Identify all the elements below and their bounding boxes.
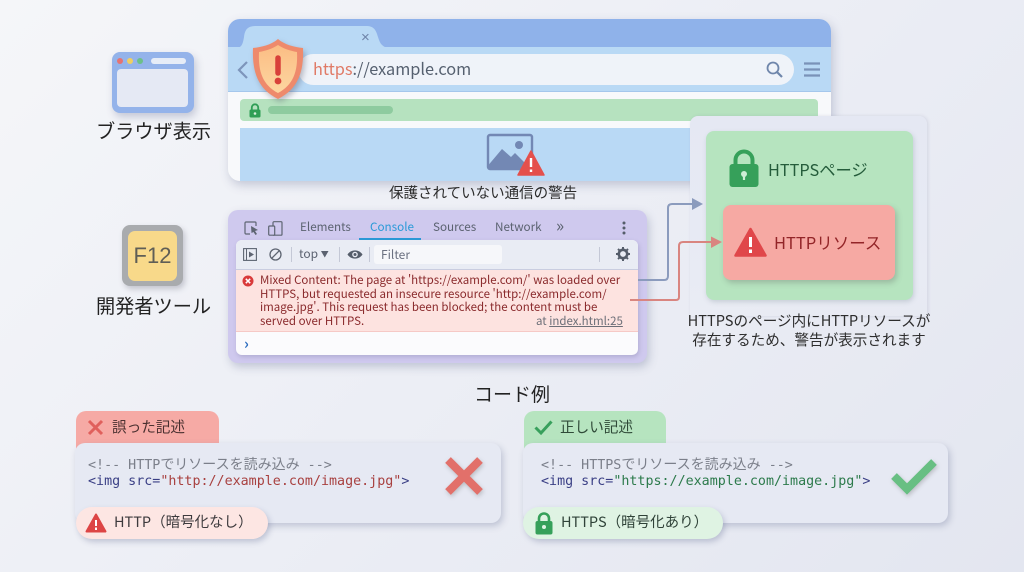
active tab underline	[359, 238, 421, 240]
icon: small lock	[250, 103, 260, 118]
icon: error	[242, 276, 254, 286]
icon: large check	[891, 459, 938, 497]
icon: search	[766, 62, 783, 78]
error text: Mixed Content: The page at 'https://example.com/' was loaded over	[260, 272, 620, 288]
tab: correct	[524, 411, 666, 453]
icon: device	[268, 221, 283, 236]
error text	[260, 272, 620, 328]
panel: https page	[706, 131, 913, 300]
divider	[291, 247, 292, 262]
icon: kebab menu	[622, 222, 626, 234]
caption: explanation: HTTPSのページ内にHTTPリソースが	[688, 310, 930, 331]
code comment: <!-- HTTPでリソースを読み込み -->	[88, 454, 332, 474]
icon: lock	[536, 512, 552, 534]
icon: warning	[734, 228, 767, 257]
panel: explanation card	[690, 116, 927, 316]
label: https: HTTPS（暗号化あり）	[561, 511, 708, 532]
label: http resource: HTTPリソース	[774, 230, 881, 254]
error text: image.jpg'. This request has been blocked; the content must be	[260, 299, 597, 315]
panel: devtools console: »	[556, 212, 564, 237]
error text: HTTPS, but requested an insecure resource 'http://example.com/	[260, 286, 607, 302]
caption: explanation: 存在するため、警告が表示されます	[692, 329, 926, 350]
console toolbar	[236, 240, 638, 270]
address bar	[298, 54, 794, 85]
url text: https://example.com	[313, 56, 471, 80]
label: http: HTTP（暗号化なし）	[114, 511, 253, 532]
icon: small check	[534, 420, 552, 435]
divider	[369, 247, 370, 262]
tab close mark: ×	[361, 29, 370, 46]
label: incorrect: 誤った記述	[112, 416, 185, 437]
code line: <img src="https://example.com/image.jpg">	[541, 474, 870, 489]
caption: insecure warning: 保護されていない通信の警告	[389, 182, 577, 203]
panel: devtools console: Console	[370, 218, 414, 235]
panel: http resource	[723, 205, 895, 280]
code line: <img src="http://example.com/image.jpg">	[88, 474, 409, 489]
filter input	[374, 245, 502, 264]
badge: http no encryption	[76, 507, 268, 539]
filter input: Filter	[381, 246, 410, 263]
icon: eye	[348, 250, 362, 259]
browser title bar	[228, 19, 831, 47]
icon: small cross	[88, 420, 103, 435]
panel: devtools console: Network	[495, 218, 542, 235]
icon: menu	[804, 62, 820, 77]
caption: explanation	[688, 310, 930, 350]
arrow: error to http resource	[630, 236, 722, 301]
heading: code examples: コード例	[474, 380, 550, 407]
panel: incorrect code	[75, 443, 501, 523]
context selector: top ▼	[299, 245, 329, 262]
browser toolbar	[228, 47, 831, 92]
devtools tabs: Elements	[300, 218, 351, 235]
error message	[236, 270, 638, 332]
icon: warning	[86, 514, 106, 532]
panel: correct code	[523, 443, 948, 523]
icon: browser window	[112, 52, 194, 113]
key cap	[128, 231, 177, 281]
label: https page: HTTPSページ	[768, 157, 868, 181]
icon: inspect	[244, 221, 258, 235]
panel: devtools console: Sources	[433, 218, 476, 235]
divider	[339, 247, 340, 262]
panel: browser window	[228, 19, 831, 181]
divider	[599, 247, 600, 262]
back arrow	[238, 61, 248, 79]
icon: sidebar toggle	[243, 248, 257, 261]
icon: blocked image	[486, 134, 545, 176]
icon: clear console	[269, 248, 282, 261]
tab: incorrect	[76, 411, 219, 453]
icon: large cross	[445, 457, 484, 498]
browser tab	[240, 26, 384, 47]
icon: F12 key	[122, 225, 183, 286]
source link: at index.html:25	[536, 313, 623, 329]
arrow: console to https page	[638, 198, 703, 281]
prompt: ›	[244, 333, 249, 354]
panel: devtools console	[228, 210, 647, 363]
code comment: <!-- HTTPSでリソースを読み込み -->	[541, 454, 793, 474]
content area	[240, 128, 831, 181]
label: developer tools: 開発者ツール	[96, 291, 211, 319]
icon: warning shield	[252, 39, 308, 104]
label: browser display: ブラウザ表示	[96, 116, 211, 144]
badge: https encrypted	[523, 507, 723, 539]
console body	[236, 240, 638, 355]
key cap: F12	[134, 243, 171, 268]
error text: served over HTTPS.	[260, 312, 364, 328]
icon: lock	[730, 150, 758, 187]
label: correct: 正しい記述	[560, 416, 633, 437]
icon: settings gear	[616, 247, 630, 261]
secure bar	[240, 99, 818, 121]
placeholder line	[268, 106, 393, 114]
